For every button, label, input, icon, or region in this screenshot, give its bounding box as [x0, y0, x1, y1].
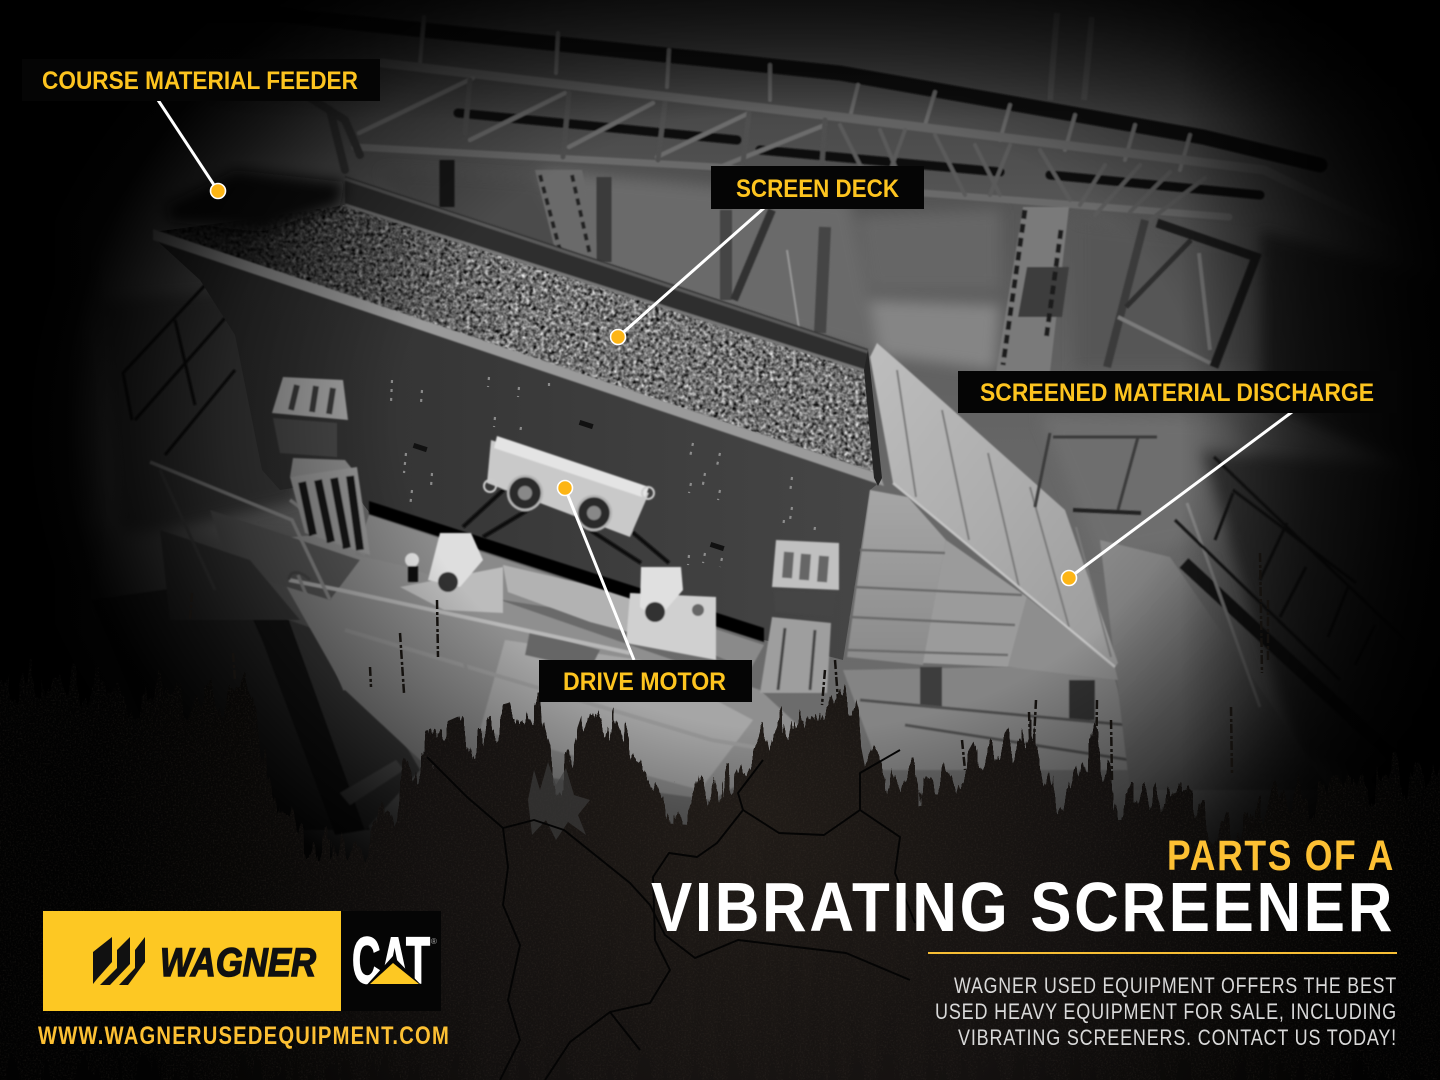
title block — [651, 832, 1395, 946]
photo: deck lower lip — [153, 229, 884, 486]
callout: screened material discharge — [958, 371, 1397, 586]
photo: walkway rails — [150, 462, 860, 765]
divider — [928, 952, 1397, 954]
photo: deck end wall — [864, 350, 882, 486]
icon: wagner mark — [93, 937, 145, 985]
callout: drive motor — [539, 480, 752, 702]
photo: screener bottom shadow rail — [369, 501, 764, 642]
label text: SCREENED MATERIAL DISCHARGE — [980, 379, 1374, 407]
marker dot — [1062, 570, 1076, 586]
photo: right ramp behind chute — [1100, 540, 1330, 790]
label text: COURSE MATERIAL FEEDER — [42, 67, 358, 95]
photo: left drive motor unit — [400, 533, 503, 613]
photo: right electrical box — [760, 540, 839, 693]
photo: deck upper side wall — [345, 176, 868, 372]
icon: cat triangle — [364, 956, 424, 988]
photo: gravel on screen deck — [161, 205, 874, 472]
label box — [22, 59, 380, 101]
leader line — [158, 100, 218, 191]
photo: platform railing behind chute — [1035, 433, 1157, 513]
photo: panel bolt rows — [391, 377, 815, 567]
ground: base fill under torn band — [0, 930, 1440, 1080]
description text — [935, 973, 1397, 1050]
marker dot — [210, 184, 226, 198]
leader line — [618, 208, 764, 337]
ground: torn gap showing photo — [528, 762, 590, 840]
ground: cracks — [427, 750, 915, 1080]
leader line — [1069, 412, 1292, 578]
logo: wagner wordmark: WAGNER — [160, 941, 316, 985]
photo: feed hopper shadow — [165, 170, 345, 232]
photo: lower dark wedge and girder — [90, 575, 420, 835]
logo: wagner panel — [43, 911, 341, 1011]
photo: ground light and shadow patches — [90, 170, 1440, 800]
photo: upper electrical box — [272, 377, 370, 555]
photo: walkway floor — [160, 510, 814, 800]
stray drips above torn edge — [190, 553, 1268, 780]
photo: panel slots — [413, 420, 725, 551]
label box — [539, 660, 752, 702]
photo: left side railing — [123, 283, 235, 455]
photo: support columns and bracing — [447, 160, 1256, 372]
label text: DRIVE MOTOR — [563, 668, 726, 696]
photo: discharge hopper — [847, 490, 1118, 680]
photo: right stairs and rails — [1175, 457, 1405, 757]
cracked earth torn edge — [0, 680, 1440, 1080]
ground: jagged dark band — [0, 680, 1440, 1080]
photo: screener side wall — [153, 237, 880, 660]
leader line — [565, 488, 634, 660]
photo: discharge chute flap — [870, 343, 1118, 667]
logo lockup — [38, 911, 450, 1050]
photo: vibrator gearbox — [463, 436, 669, 563]
label box — [711, 166, 924, 209]
logo: website url: WWW.WAGNERUSEDEQUIPMENT.COM — [38, 1022, 450, 1050]
callout: screen deck — [610, 166, 924, 344]
background photo: vibrating screener plant — [86, 0, 1386, 862]
label box — [958, 371, 1397, 413]
photo: right drive motor unit — [626, 567, 716, 660]
photo: overhead conveyor truss — [250, 12, 1394, 233]
photo: platform below chute — [843, 665, 1180, 770]
logo: registered mark: ® — [431, 937, 437, 946]
marker dot — [610, 330, 626, 344]
logo: cat panel — [341, 911, 441, 1011]
label text: SCREEN DECK — [736, 175, 899, 203]
title: parts of a: PARTS OF A — [1167, 832, 1395, 880]
callout: course material feeder — [22, 59, 380, 198]
photo: column above conveyor — [1050, 13, 1092, 100]
logo: cat wordmark: CAT — [352, 923, 430, 997]
marker dot — [558, 480, 572, 496]
